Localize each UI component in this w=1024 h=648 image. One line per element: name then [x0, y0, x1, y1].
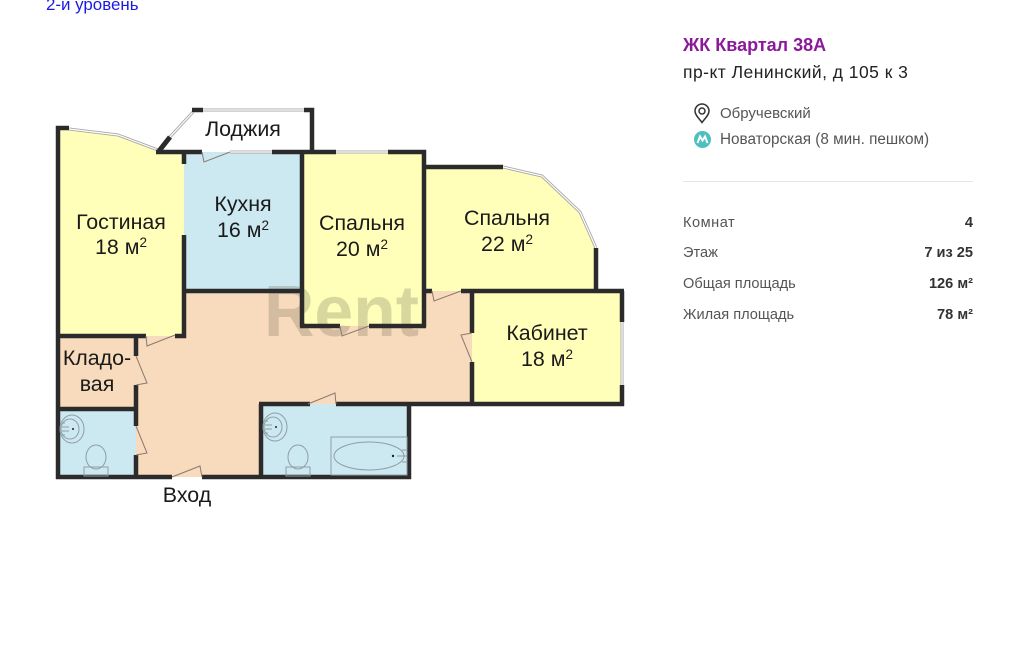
divider [683, 181, 973, 182]
doors [136, 152, 472, 477]
row: rooms [683, 215, 973, 231]
label: living room area: 18 м [95, 235, 139, 259]
district: Обручевский [720, 105, 811, 122]
room labels [63, 117, 588, 507]
label: kitchen: Кухня [214, 192, 272, 216]
label: study area: 2 [565, 347, 573, 362]
row: living area [683, 307, 973, 323]
label: bedroom 2 area: 2 [525, 232, 533, 247]
room: storage [58, 336, 136, 409]
label: living room: Гостиная [76, 210, 166, 234]
label: bedroom 2 area: 22 м [481, 232, 525, 256]
metro station: Новаторская (8 мин. пешком) [720, 131, 929, 148]
label: study area: 18 м [521, 347, 565, 371]
label: entrance: Вход [163, 483, 212, 507]
row: rooms: Комнат [683, 215, 735, 231]
room: hall [136, 290, 472, 477]
label: storage line 2: вая [80, 372, 114, 396]
room: kitchen [184, 152, 302, 290]
room: bedroom 22 [424, 167, 596, 291]
walls [56, 110, 624, 479]
address: пр-кт Ленинский, д 105 к 3 [683, 62, 908, 82]
icon: metro [694, 131, 711, 148]
label: bedroom 2: Спальня [464, 206, 550, 230]
label: loggia: Лоджия [205, 117, 281, 141]
room: bathroom left [58, 409, 136, 477]
label: bedroom area: 20 м [336, 237, 380, 261]
windows [69, 110, 622, 385]
icon: location pin [694, 103, 710, 124]
watermark: Rent [264, 272, 419, 352]
row: floor [683, 245, 973, 261]
row: living area: 78 м² [937, 307, 973, 323]
room: living room [58, 128, 184, 336]
row: total area: 126 м² [929, 276, 973, 292]
label: bedroom area: 2 [380, 237, 388, 252]
row: living area: Жилая площадь [683, 307, 794, 323]
heading: complex name: ЖК Квартал 38А [683, 35, 826, 55]
room: bedroom 20 [302, 152, 424, 326]
label: study: Кабинет [506, 321, 588, 345]
row: rooms: 4 [965, 215, 973, 231]
row: floor: 7 из 25 [924, 245, 973, 261]
label: living room area: 2 [139, 235, 147, 250]
label: kitchen area: 16 м [217, 218, 261, 242]
fixtures: left bathroom [60, 415, 108, 476]
room: study [472, 291, 622, 404]
row: total area: Общая площадь [683, 276, 796, 292]
label: storage: Кладо- [63, 346, 131, 370]
room: bathroom right [261, 404, 409, 477]
label: kitchen area: 2 [261, 218, 269, 233]
label: bedroom: Спальня [319, 211, 405, 235]
row: floor: Этаж [683, 245, 718, 261]
row: total area [683, 276, 973, 292]
floor plan [56, 108, 624, 507]
fixtures: right bathroom [263, 413, 407, 476]
